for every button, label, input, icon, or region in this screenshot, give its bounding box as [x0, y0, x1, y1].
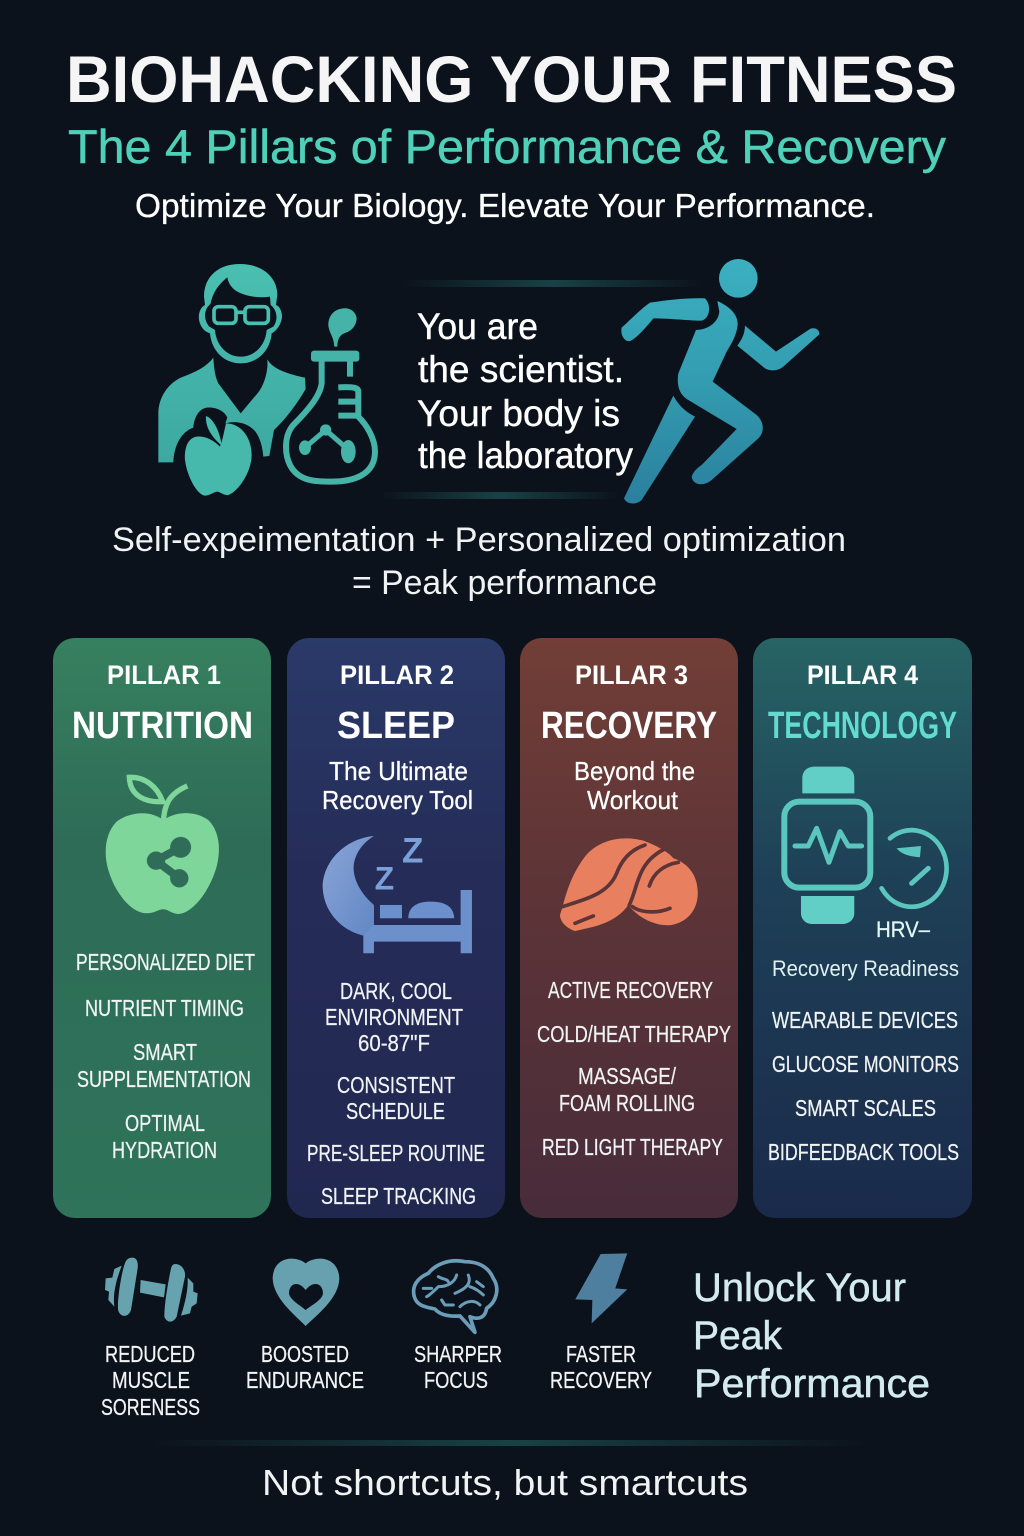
icon: runner — [621, 259, 819, 504]
benefit: sharper focus: SHARPER — [414, 1341, 502, 1367]
benefit: boosted endurance — [246, 1259, 364, 1393]
subheading: beyond the workout: Workout — [587, 785, 679, 815]
icon: dumbbell — [105, 1258, 198, 1322]
subheading: the ultimate recovery tool: Recovery Tool — [322, 785, 473, 815]
equation text: = Peak performance — [352, 564, 657, 602]
icon: lightning bolt — [575, 1253, 627, 1323]
list: recovery items: RED LIGHT THERAPY — [542, 1134, 723, 1160]
icon: lab coat — [158, 358, 306, 462]
list: nutrition items — [76, 949, 255, 1163]
list: technology items — [768, 1007, 959, 1165]
list: sleep items — [307, 978, 485, 1209]
label: recovery readiness: Recovery Readiness — [772, 956, 959, 981]
benefit: faster recovery — [550, 1253, 652, 1393]
list: nutrition items: OPTIMAL — [125, 1110, 205, 1136]
list: recovery items: ACTIVE RECOVERY — [548, 977, 713, 1003]
list: sleep items: ENVIRONMENT — [325, 1004, 463, 1030]
list: sleep items: 60-87"F — [358, 1030, 430, 1056]
list: technology items: BIDFEEDBACK TOOLS — [768, 1139, 959, 1165]
benefit: reduced muscle soreness: SORENESS — [101, 1394, 200, 1420]
benefit: reduced muscle soreness: MUSCLE — [112, 1367, 190, 1393]
benefit: reduced muscle soreness — [101, 1258, 200, 1420]
icon: apple with nodes — [106, 777, 219, 914]
list: technology items: WEARABLE DEVICES — [772, 1007, 958, 1033]
callout: unlock your peak performance — [693, 1266, 930, 1406]
benefit: faster recovery: FASTER — [566, 1341, 636, 1367]
list: nutrition items: HYDRATION — [112, 1137, 217, 1163]
list: sleep items: SCHEDULE — [346, 1098, 445, 1124]
subtitle: The 4 Pillars of Performance & Recovery — [68, 120, 947, 173]
list: nutrition items: PERSONALIZED DIET — [76, 949, 255, 975]
icon: brain — [414, 1261, 497, 1332]
heading: sleep: SLEEP — [337, 705, 455, 747]
benefit: faster recovery: RECOVERY — [550, 1367, 652, 1393]
title: BIOHACKING YOUR FITNESS — [66, 42, 957, 116]
list: nutrition items: SUPPLEMENTATION — [77, 1066, 251, 1092]
subheading: beyond the workout: Beyond the — [574, 756, 695, 786]
icon: muscle — [560, 838, 698, 931]
heading: pillar 4: PILLAR 4 — [807, 660, 918, 690]
scientist statement — [417, 306, 633, 476]
equation text — [112, 521, 846, 602]
panel: pillar 2 sleep — [287, 638, 505, 1218]
scientist statement: the scientist. — [418, 349, 624, 390]
equation text: Self-expeimentation + Personalized optimization — [112, 521, 846, 559]
list: nutrition items: SMART — [133, 1039, 197, 1065]
list: technology items: GLUCOSE MONITORS — [772, 1051, 959, 1077]
benefit: reduced muscle soreness: REDUCED — [105, 1341, 195, 1367]
list: recovery items: FOAM ROLLING — [559, 1090, 695, 1116]
benefit: boosted endurance: ENDURANCE — [246, 1367, 364, 1393]
icon: moon and bed: Z — [375, 860, 394, 896]
icon: flask — [286, 308, 375, 482]
subheading: beyond the workout — [574, 756, 695, 815]
scientist statement: Your body is — [417, 393, 620, 434]
tagline: Optimize Your Biology. Elevate Your Performance. — [135, 187, 875, 224]
list: sleep items: CONSISTENT — [337, 1072, 455, 1098]
footer tagline: Not shortcuts, but smartcuts — [262, 1462, 748, 1503]
list: sleep items: PRE-SLEEP ROUTINE — [307, 1140, 485, 1166]
heading: nutrition: NUTRITION — [72, 705, 253, 747]
benefit: sharper focus — [414, 1261, 502, 1393]
label: hrv: HRV– — [876, 917, 931, 942]
callout: unlock your peak performance: Peak — [693, 1314, 783, 1358]
list: sleep items: SLEEP TRACKING — [321, 1183, 476, 1209]
icon: scientist with apple and flask — [158, 264, 375, 496]
icon: apple — [185, 416, 252, 496]
list: nutrition items: NUTRIENT TIMING — [85, 995, 244, 1021]
heading: pillar 2: PILLAR 2 — [340, 660, 454, 690]
benefit: boosted endurance: BOOSTED — [261, 1341, 349, 1367]
icon: scientist head — [199, 264, 282, 363]
callout: unlock your peak performance: Unlock Your — [693, 1266, 906, 1310]
scientist statement: the laboratory — [418, 435, 633, 476]
list: recovery items — [537, 977, 731, 1160]
heading: recovery: RECOVERY — [541, 705, 717, 747]
icon: heart — [273, 1259, 339, 1326]
heading: pillar 3: PILLAR 3 — [575, 660, 688, 690]
callout: unlock your peak performance: Performance — [694, 1362, 930, 1406]
subheading: the ultimate recovery tool — [322, 756, 473, 815]
icon: moon and bed: Z — [402, 832, 423, 871]
list: recovery items: COLD/HEAT THERAPY — [537, 1021, 731, 1047]
list: sleep items: DARK, COOL — [340, 978, 452, 1004]
panel: pillar 1 nutrition — [53, 638, 271, 1218]
benefit: sharper focus: FOCUS — [424, 1367, 488, 1393]
panel: pillar 4 technology — [753, 638, 972, 1218]
subheading: the ultimate recovery tool: The Ultimate — [329, 756, 468, 786]
list: recovery items: MASSAGE/ — [578, 1063, 676, 1089]
icon: moon and bed — [323, 832, 472, 953]
panel: pillar 3 recovery — [520, 638, 738, 1218]
icon: smartwatch and gauge — [784, 767, 947, 924]
scientist statement: You are — [417, 306, 538, 347]
heading: pillar 1: PILLAR 1 — [107, 660, 221, 690]
list: technology items: SMART SCALES — [795, 1095, 936, 1121]
